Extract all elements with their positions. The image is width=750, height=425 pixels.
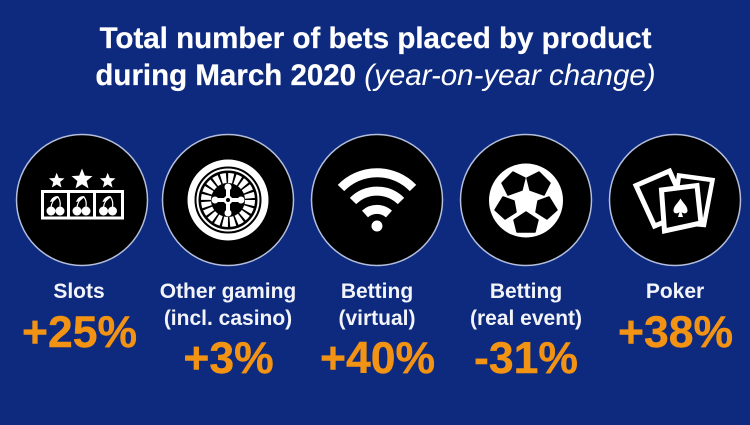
panel: betting real event	[460, 134, 592, 383]
value: +25%	[22, 308, 137, 357]
icon: roulette wheel	[162, 134, 294, 266]
panel: poker	[610, 134, 740, 357]
icon: soccer ball	[460, 134, 592, 266]
label: (real event)	[470, 307, 582, 330]
label: (incl. casino)	[164, 307, 292, 330]
label	[470, 280, 582, 330]
value: +3%	[183, 334, 274, 383]
label: (virtual)	[338, 307, 416, 330]
panel: other gaming	[160, 134, 296, 383]
icon: slot machine	[16, 134, 148, 266]
label	[160, 280, 296, 330]
label	[338, 280, 416, 330]
title: Total number of bets placed by product	[100, 22, 652, 55]
value: +38%	[618, 308, 733, 357]
value: -31%	[474, 334, 578, 383]
panel: betting virtual	[312, 134, 442, 383]
label: Betting	[341, 280, 413, 303]
title: during March 2020 (year-on-year change)	[95, 59, 656, 92]
icon: wifi	[312, 134, 442, 266]
icon: playing cards	[610, 134, 740, 266]
panel: slots	[16, 134, 148, 357]
label: Other gaming	[160, 280, 296, 303]
value: +40%	[320, 334, 435, 383]
label: Slots	[53, 280, 105, 303]
title	[95, 22, 656, 92]
label: Poker	[646, 280, 704, 303]
label: Betting	[490, 280, 562, 303]
